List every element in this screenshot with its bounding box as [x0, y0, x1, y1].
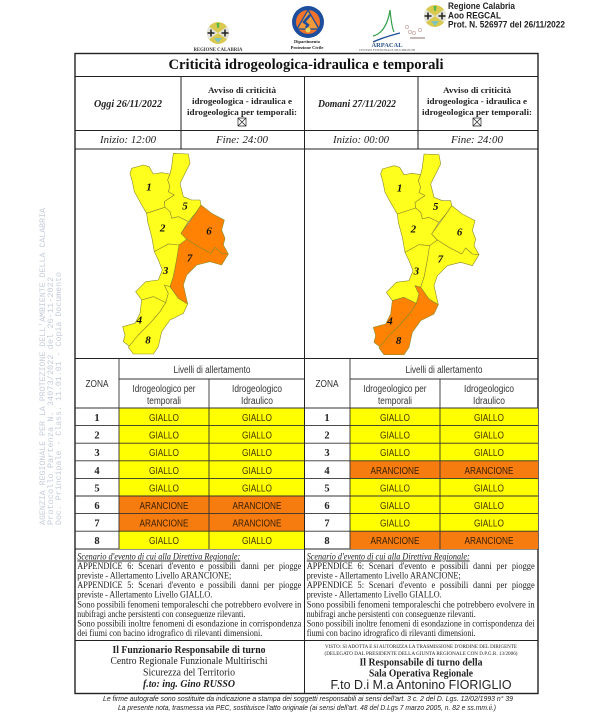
- panel: tomorrow header: Domani 27/11/2022: [317, 99, 396, 110]
- table: alert levels tomorrow: ARANCIONE: [370, 536, 420, 547]
- table: alert levels today: 4: [94, 466, 100, 477]
- signature: regional operations room: Sala Operativa Regionale: [369, 668, 474, 680]
- map: Calabria tomorrow: 7: [438, 253, 444, 265]
- table: alert levels today: GIALLO: [149, 466, 179, 477]
- table: alert levels today: GIALLO: [149, 413, 179, 424]
- table: alert levels tomorrow: Idraulico: [473, 396, 505, 407]
- table: alert levels today: GIALLO: [149, 483, 179, 494]
- text block: scenario tomorrow: nubifragi anche persistenti con conseguenze rilevanti.: [307, 609, 476, 620]
- table: alert levels today: Idraulico: [241, 396, 273, 407]
- map: Calabria tomorrow: 6: [457, 226, 463, 238]
- footer note: La presente nota, trasmessa via PEC, sostituisce l'atto originale (ai sensi dell'art. 48 del D.Lgs 7 marzo 2005, n. 82 e ss.mm.ii.): [118, 703, 496, 712]
- table: alert levels today: 1: [94, 413, 100, 424]
- signature: regional operations room: [324, 645, 518, 692]
- panel: bulletin frame: [75, 54, 538, 694]
- table: alert levels tomorrow: ARANCIONE: [464, 466, 514, 477]
- map: Calabria tomorrow: 8: [396, 335, 402, 347]
- table: alert levels tomorrow: ARANCIONE: [464, 536, 514, 547]
- panel: tomorrow header: [317, 85, 532, 146]
- table: alert levels today: Idrogeologico per: [132, 384, 196, 395]
- text block: scenario tomorrow: fiumi con bacino idrografico di rilevanti dimensioni.: [307, 628, 476, 639]
- text block: scenario today: [77, 552, 302, 639]
- table: alert levels today: GIALLO: [242, 448, 272, 459]
- table: alert levels tomorrow: [304, 359, 538, 549]
- table: alert levels tomorrow: Idrogeologico: [464, 384, 514, 395]
- map: Calabria today: 8: [145, 334, 151, 346]
- table: alert levels tomorrow: GIALLO: [474, 519, 504, 530]
- protocol label: Prot. N. 526977 del 26/11/2022: [448, 20, 565, 30]
- table: alert levels tomorrow: 7: [324, 519, 330, 530]
- table: alert levels today: ARANCIONE: [140, 519, 189, 530]
- signature: regional operations room: VISTO: SI ADOTTA E SI AUTORIZZA LA TRASMISSIONE D'ORDINE DEL DIRIGENTE: [325, 645, 517, 650]
- title: Criticità idrogeologica-idraulica e temporali: [168, 57, 444, 73]
- table: alert levels tomorrow: ARANCIONE: [370, 466, 420, 477]
- table: alert levels today: ZONA: [86, 379, 109, 390]
- table: alert levels tomorrow: GIALLO: [474, 413, 504, 424]
- footer note: Le firme autografe sono sostituite da indicazione a stampa dei soggetti responsabili ai sensi dell'art. 3 c. 2 del D. Lgs. 12/02/1993 n° 39: [103, 694, 514, 703]
- logo: ARPACAL: ARPACAL: [372, 43, 402, 49]
- map: Calabria tomorrow: 1: [397, 182, 402, 194]
- stamp: protocol watermark: AGENZIA REGIONALE PER LA PROTEZIONE DELL'AMBIENTE DELLA CALABRIA: [38, 208, 48, 525]
- map: Calabria today: 4: [136, 315, 143, 327]
- table: alert levels today: ARANCIONE: [232, 501, 282, 512]
- stamp: protocol watermark: Protocollo Partenza N. 34073/2022 del 26-11-2022: [46, 277, 56, 525]
- table: alert levels today: 2: [94, 431, 100, 442]
- table: alert levels tomorrow: GIALLO: [380, 413, 410, 424]
- table: alert levels today: 5: [94, 483, 100, 494]
- table: alert levels today: GIALLO: [242, 431, 272, 442]
- signature: regional operations room: F.to D.i M.a Antonino FIORIGLIO: [330, 677, 512, 692]
- stamp: protocol watermark: [38, 208, 64, 525]
- panel: today header: [94, 85, 297, 146]
- table: alert levels tomorrow: GIALLO: [380, 519, 410, 530]
- table: alert levels tomorrow: 8: [324, 536, 330, 547]
- panel: tomorrow header: idrogeologica - idraulica e: [427, 96, 527, 106]
- protocol label: Aoo REGCAL: [448, 10, 502, 20]
- table: alert levels tomorrow: 1: [324, 413, 330, 424]
- table: alert levels tomorrow: GIALLO: [380, 448, 410, 459]
- panel: today header: Avviso di criticità: [208, 85, 277, 95]
- table: alert levels today: GIALLO: [242, 413, 272, 424]
- stamp: protocol watermark: Doc. Principale - Class. 11.01.01 - Copia Documento: [54, 272, 64, 525]
- panel: today header: idrogeologica - idraulica e: [192, 96, 292, 106]
- signature: regional operations room: (DELEGATO DAL PRESIDENTE DELLA GIUNTA REGIONALE CON D.P.G.R. 13/2006): [324, 652, 518, 657]
- panel: today header: idrogeologica per temporali:: [187, 107, 297, 117]
- text block: scenario today: dei fiumi con bacino idrografico di rilevanti dimensioni.: [77, 628, 262, 639]
- table: alert levels tomorrow: GIALLO: [474, 483, 504, 494]
- table: alert levels tomorrow: temporali: [378, 396, 412, 407]
- map: Calabria tomorrow: 2: [410, 223, 417, 235]
- table: alert levels tomorrow: Idrogeologico per: [364, 384, 427, 395]
- panel: today header: Oggi 26/11/2022: [94, 99, 162, 110]
- table: alert levels tomorrow: GIALLO: [380, 431, 410, 442]
- text block: scenario tomorrow: APPENDICE 6: Scenari d'evento e possibili danni per piogge: [307, 562, 535, 572]
- signature: duty officer: f.to: ing. Gino RUSSO: [143, 679, 235, 690]
- logo: Dipartimento Protezione Civile: Dipartimento: [294, 39, 321, 44]
- logo: Regione Calabria: [194, 22, 243, 53]
- map: Calabria tomorrow: 4: [386, 315, 393, 327]
- table: alert levels today: GIALLO: [149, 536, 179, 547]
- map: Calabria today: 2: [159, 223, 166, 235]
- logo: Dipartimento Protezione Civile: [291, 6, 324, 50]
- table: alert levels today: GIALLO: [149, 431, 179, 442]
- text block: scenario tomorrow: previste - Allertamento Livello ARANCIONE;: [307, 572, 461, 582]
- signature: duty officer: Sicurezza del Territorio: [143, 668, 235, 678]
- logo: ARPACAL: CENTRO FUNZIONALE MULTIRISCHI: [359, 48, 415, 52]
- map: Calabria today: 5: [182, 200, 188, 212]
- text block: scenario today: Sono possibili inoltre fenomeni di esondazione in corrispondenza: [77, 618, 302, 629]
- panel: today header: Inizio: 12:00: [99, 135, 157, 146]
- text block: scenario tomorrow: APPENDICE 5: Scenari d'evento e possibili danni per piogge: [307, 581, 535, 591]
- protocol label: Regione Calabria: [448, 1, 515, 11]
- table: alert levels tomorrow: 2: [324, 431, 330, 442]
- signature: duty officer: [110, 645, 268, 690]
- signature: regional operations room: Il Responsabile di turno della: [360, 658, 482, 668]
- logo: Regione Calabria: REGIONE CALABRIA: [194, 48, 243, 53]
- footer note: [103, 694, 514, 712]
- text block: scenario tomorrow: [307, 552, 535, 639]
- table: alert levels today: Idrogeologico: [232, 384, 282, 395]
- table: alert levels today: temporali: [147, 396, 181, 407]
- table: alert levels today: 3: [94, 448, 100, 459]
- logo: Dipartimento Protezione Civile: Protezione Civile: [291, 45, 323, 50]
- table: alert levels today: 6: [94, 501, 100, 512]
- panel: tomorrow header: idrogeologica per temporali:: [422, 107, 532, 117]
- table: alert levels tomorrow: 5: [324, 483, 330, 494]
- map: Calabria tomorrow: [373, 154, 479, 355]
- table: alert levels tomorrow: 4: [324, 466, 330, 477]
- text block: scenario tomorrow: Sono possibili inoltre fenomeni di esondazione in corrispondenza dei: [307, 618, 535, 629]
- table: alert levels tomorrow: Livelli di allertamento: [406, 365, 483, 376]
- table: alert levels today: GIALLO: [149, 448, 179, 459]
- panel: tomorrow header: Inizio: 00:00: [332, 135, 390, 146]
- map: Calabria today: 6: [206, 226, 212, 238]
- map: Calabria tomorrow: 3: [413, 266, 420, 278]
- text block: scenario today: nubifragi anche persistenti con conseguenze rilevanti.: [77, 609, 245, 620]
- table: alert levels today: [75, 359, 304, 549]
- signature: duty officer: Centro Regionale Funzionale Multirischi: [110, 656, 268, 667]
- table: alert levels today: ARANCIONE: [140, 501, 189, 512]
- table: alert levels tomorrow: 6: [324, 501, 330, 512]
- signature: duty officer: Il Funzionario Responsabile di turno: [112, 645, 266, 656]
- table: alert levels tomorrow: GIALLO: [474, 501, 504, 512]
- table: alert levels today: GIALLO: [242, 466, 272, 477]
- panel: tomorrow header: Fine: 24:00: [450, 135, 504, 146]
- map: Calabria today: 3: [162, 265, 169, 277]
- table: alert levels tomorrow: 3: [324, 448, 330, 459]
- text block: scenario today: APPENDICE 6: Scenari d'evento e possibili danni per piogge: [77, 562, 301, 572]
- table: alert levels tomorrow: GIALLO: [380, 501, 410, 512]
- table: alert levels today: GIALLO: [242, 483, 272, 494]
- map: Calabria today: 7: [187, 253, 193, 265]
- text block: scenario tomorrow: Scenario d'evento di cui alla Direttiva Regionale:: [307, 552, 470, 562]
- map: Calabria today: 1: [146, 182, 152, 194]
- map: Calabria today: [123, 153, 228, 354]
- table: alert levels today: GIALLO: [242, 536, 272, 547]
- text block: scenario tomorrow: previste - Allertamento Livello GIALLO.: [307, 591, 442, 601]
- table: alert levels tomorrow: ZONA: [316, 379, 339, 390]
- protocol label: [424, 1, 565, 30]
- text block: scenario today: previste - Allertamento Livello ARANCIONE;: [77, 572, 231, 582]
- map: Calabria tomorrow: 5: [433, 201, 439, 213]
- table: alert levels today: 8: [94, 536, 100, 547]
- panel: tomorrow header: Avviso di criticità: [443, 85, 512, 95]
- table: alert levels today: Livelli di allertamento: [174, 365, 251, 376]
- text block: scenario today: previste - Allertamento Livello GIALLO.: [77, 591, 212, 601]
- panel: today header: Fine: 24:00: [215, 135, 269, 146]
- table: alert levels today: 7: [94, 519, 100, 530]
- text block: scenario today: Sono possibili fenomeni temporaleschi che potrebbero evolvere in: [77, 599, 302, 610]
- text block: scenario today: APPENDICE 5: Scenari d'evento e possibili danni per piogge: [77, 581, 301, 591]
- logo: ARPACAL: [359, 10, 425, 52]
- text block: scenario tomorrow: Sono possibili fenomeni temporaleschi che potrebbero evolvere in: [307, 599, 535, 610]
- table: alert levels tomorrow: GIALLO: [474, 431, 504, 442]
- table: alert levels tomorrow: GIALLO: [380, 483, 410, 494]
- table: alert levels today: ARANCIONE: [232, 519, 282, 530]
- table: alert levels tomorrow: GIALLO: [474, 448, 504, 459]
- text block: scenario today: Scenario d'evento di cui alla Direttiva Regionale:: [77, 552, 240, 562]
